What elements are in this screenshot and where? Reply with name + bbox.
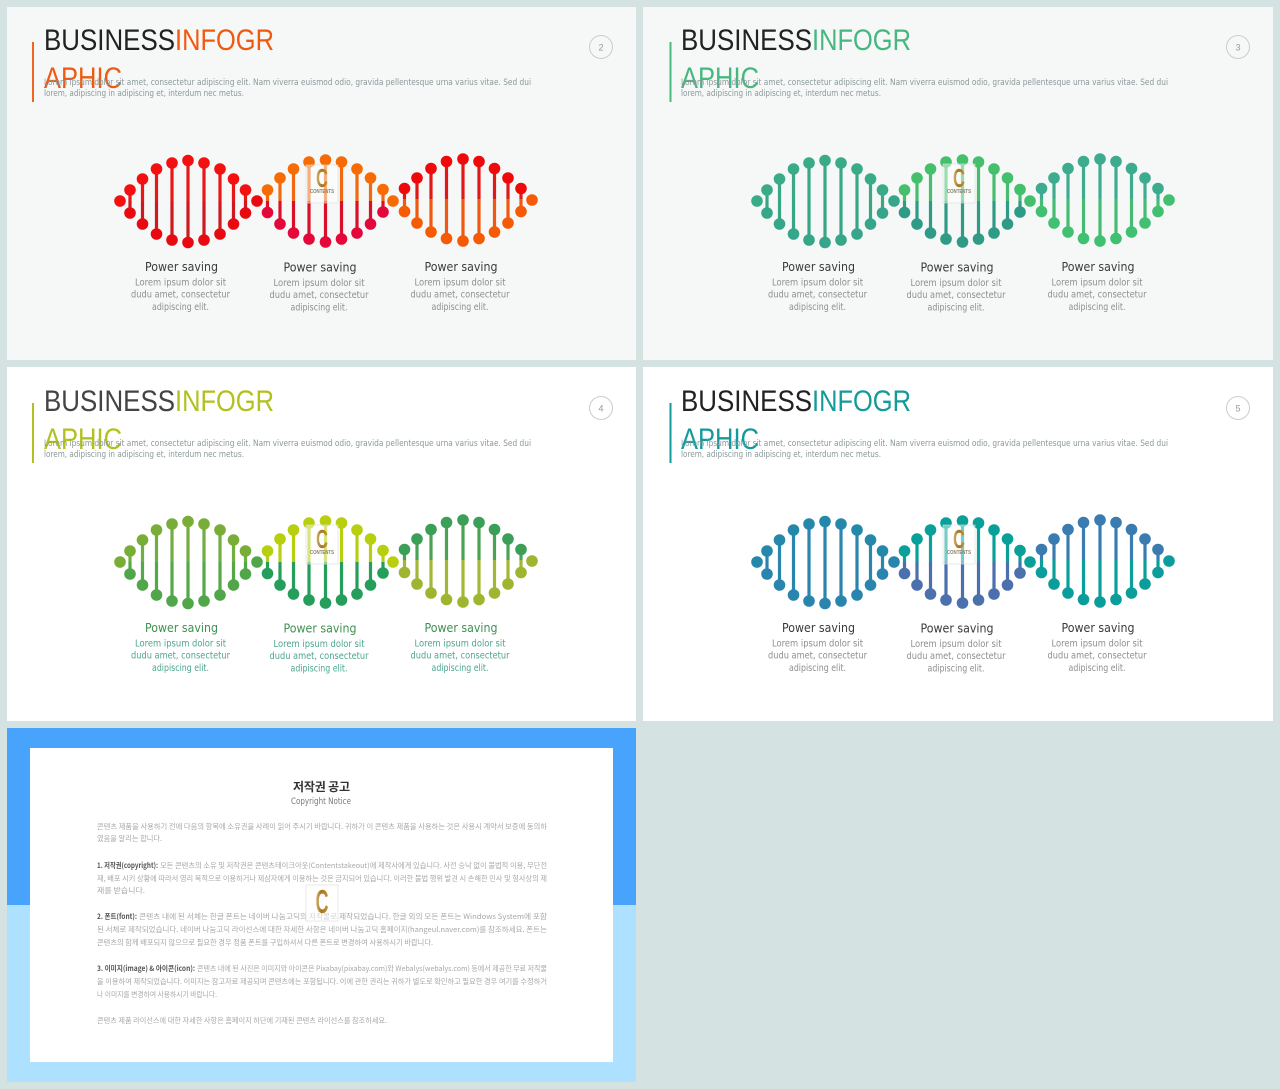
paragraph 3 images and icons: 콘텐츠 내에 된 사진은 이미지와 아이콘은 Pixabay(pixabay.com)와 Webalys(webalys.com) 등에서 제공한 무료 저작물: [197, 963, 547, 974]
label 1: dudu amet, consectetur: [131, 290, 231, 300]
paragraph 1 copyright: 재를 받습니다.: [97, 885, 145, 896]
title: [681, 24, 911, 95]
paragraph 2 font: 콘텐츠의 함께 배포되지 않으므로 필요한 경우 정품 폰트를 구입하셔서 다른 폰트로 변경하여 사용하시기 바랍니다.: [97, 937, 433, 948]
label 3: Lorem ipsum dolor sit: [414, 278, 506, 288]
label 3: Lorem ipsum dolor sit: [414, 638, 506, 650]
notice heading: 저작권 공고: [293, 778, 350, 795]
label 2: Power saving: [920, 622, 994, 636]
label 1: dudu amet, consectetur: [768, 650, 868, 662]
label 2: dudu amet, consectetur: [270, 651, 369, 662]
panel: slide 4 lime helix: [7, 367, 636, 721]
label 3: dudu amet, consectetur: [1048, 650, 1147, 662]
label 1: adipiscing elit.: [789, 302, 846, 313]
label 2: [270, 260, 369, 314]
label 2: Lorem ipsum dolor sit: [274, 639, 365, 650]
white notice card: [30, 748, 613, 1062]
watermark logo: [943, 163, 975, 203]
title: BUSINESS: [44, 385, 175, 418]
watermark logo: CONTENTS: [947, 550, 972, 556]
label 2: dudu amet, consectetur: [270, 290, 369, 301]
page number: 4: [598, 404, 604, 414]
label 3: Power saving: [1062, 260, 1134, 274]
label 1: adipiscing elit.: [152, 663, 209, 674]
strand 1: [757, 160, 894, 242]
label 1: dudu amet, consectetur: [131, 650, 231, 662]
paragraph 1 copyright: 1. 저작권(copyright):: [97, 860, 158, 871]
label 2: adipiscing elit.: [928, 664, 984, 674]
dna helix: [757, 520, 1169, 604]
watermark logo: C: [953, 524, 965, 554]
subtitle text: Lorem ipsum dolor sit amet, consectetur adipiscing elit. Nam viverra euismod odio, gravida pellentesque urna varius vitae. Sed dui: [681, 438, 1168, 448]
label 1: adipiscing elit.: [152, 302, 209, 313]
label 1: Power saving: [782, 260, 855, 274]
accent bar: [32, 403, 34, 463]
subtitle text: Lorem ipsum dolor sit amet, consectetur adipiscing elit. Nam viverra euismod odio, gravida pellentesque urna varius vitae. Sed dui: [44, 77, 531, 87]
label 1: [768, 260, 868, 313]
label 3: adipiscing elit.: [432, 302, 488, 313]
watermark logo: C: [953, 163, 965, 193]
strand 2: [904, 160, 1030, 242]
watermark logo: [943, 524, 975, 564]
page number: 2: [598, 42, 604, 52]
strand 1: [120, 160, 257, 242]
title: APHIC: [681, 423, 759, 456]
strand 2: [268, 521, 393, 603]
watermark logo: CONTENTS: [310, 189, 335, 195]
subtitle text: Lorem ipsum dolor sit amet, consectetur adipiscing elit. Nam viverra euismod odio, gravida pellentesque urna varius vitae. Sed dui: [44, 438, 531, 448]
paragraph 1 copyright: [97, 860, 547, 896]
label 2: Power saving: [284, 260, 356, 274]
panel: slide 2 red helix: [7, 7, 636, 360]
watermark logo: CONTENTS: [947, 189, 972, 195]
paragraph 2 font: 된 서체로 제작되었습니다. 네이버 나눔고딕 라이선스에 대한 자세한 사항은 네이버 나눔고딕 홈페이지(hangeul.naver.com)를 참조하세요. 폰트는: [97, 924, 547, 935]
label 2: [906, 260, 1006, 314]
page number: 5: [1235, 404, 1241, 414]
label 3: [1048, 260, 1147, 313]
title: [44, 385, 274, 456]
label 3: Power saving: [424, 621, 498, 635]
strand 3: [404, 520, 532, 602]
labels: [131, 621, 510, 674]
label 1: Lorem ipsum dolor sit: [772, 278, 863, 288]
labels: [131, 260, 510, 314]
title: BUSINESS: [681, 24, 812, 57]
closing line: 콘텐츠 제품 라이선스에 대한 자세한 사항은 홈페이지 하단에 기재된 콘텐츠 라이선스를 참조하세요.: [97, 1015, 387, 1026]
label 1: Lorem ipsum dolor sit: [135, 638, 226, 650]
panel: slide 3 green helix: [643, 7, 1273, 360]
label 3: dudu amet, consectetur: [410, 650, 510, 662]
watermark logo: [306, 524, 338, 564]
panel: slide 5 teal helix: [643, 367, 1273, 721]
label 1: Lorem ipsum dolor sit: [772, 638, 863, 650]
panel: copyright notice: [7, 728, 636, 1082]
notice heading: Copyright Notice: [291, 797, 351, 807]
label 1: [131, 260, 231, 313]
paragraph 2 font: [97, 911, 547, 948]
title: APHIC: [681, 62, 759, 95]
strand 3: [1042, 159, 1169, 241]
strand 2: [904, 521, 1030, 603]
labels: [768, 621, 1147, 674]
title: INFOGR: [175, 385, 274, 418]
title: [44, 24, 274, 95]
subtitle text: [44, 438, 531, 459]
title: INFOGR: [175, 24, 274, 57]
intro paragraph: [97, 821, 547, 844]
watermark logo: [306, 163, 338, 203]
intro paragraph: 콘텐츠 제품을 사용하기 전에 다음의 항목에 소유권을 사례이 읽어 주시기 바랍니다. 귀하가 이 콘텐츠 제품을 사용하는 것은 사용시 계약서 보증에 동의하: [97, 821, 547, 832]
notice heading: [291, 778, 351, 807]
watermark logo: CONTENTS: [310, 550, 335, 556]
label 1: adipiscing elit.: [789, 663, 846, 674]
strand 1: [757, 522, 894, 604]
label 3: dudu amet, consectetur: [410, 290, 510, 300]
label 2: [270, 622, 369, 674]
watermark logo: C: [316, 883, 328, 920]
page number: [1226, 396, 1250, 420]
label 3: [410, 260, 510, 313]
label 1: Lorem ipsum dolor sit: [135, 278, 226, 288]
watermark logo: [306, 883, 338, 921]
subtitle text: lorem, adipiscing in adipiscing et, interdum nec metus.: [44, 88, 244, 98]
label 3: [1048, 621, 1147, 674]
label 2: dudu amet, consectetur: [906, 290, 1006, 301]
paragraph 1 copyright: 재, 배포 시키 상황에 따라서 영리 목적으로 이용하거나 제삼자에게 이용하는 것은 금지되어 있습니다. 이러한 불법 행위 발견 시 손해한 민사 및 형사상의 제: [97, 873, 547, 884]
accent bar: [32, 42, 34, 102]
label 1: [131, 621, 231, 674]
subtitle text: lorem, adipiscing in adipiscing et, interdum nec metus.: [681, 88, 881, 98]
label 1: dudu amet, consectetur: [768, 290, 868, 300]
page number: [1226, 36, 1250, 58]
title: APHIC: [44, 62, 122, 95]
labels: [768, 260, 1147, 314]
subtitle text: lorem, adipiscing in adipiscing et, interdum nec metus.: [44, 449, 244, 459]
page number: [590, 396, 612, 420]
subtitle text: Lorem ipsum dolor sit amet, consectetur adipiscing elit. Nam viverra euismod odio, gravida pellentesque urna varius vitae. Sed dui: [681, 77, 1168, 87]
strand 3: [404, 159, 532, 241]
subtitle text: [681, 77, 1168, 98]
label 3: Lorem ipsum dolor sit: [1052, 278, 1143, 288]
label 2: Power saving: [920, 260, 994, 274]
dna helix: [757, 159, 1169, 242]
watermark logo: C: [316, 163, 328, 193]
title: INFOGR: [812, 24, 911, 57]
accent bar: [670, 403, 672, 463]
label 3: dudu amet, consectetur: [1048, 290, 1147, 300]
label 2: [906, 622, 1006, 674]
label 2: Lorem ipsum dolor sit: [910, 278, 1002, 289]
title: APHIC: [44, 423, 122, 456]
title: BUSINESS: [681, 385, 812, 418]
title: [681, 385, 911, 456]
dna helix: [120, 159, 532, 242]
strand 3: [1042, 520, 1169, 602]
paragraph 3 images and icons: 3. 이미지(image) & 아이콘(icon):: [97, 963, 195, 974]
label 2: Power saving: [284, 622, 356, 636]
title: INFOGR: [812, 385, 911, 418]
label 1: Power saving: [145, 260, 218, 274]
label 2: adipiscing elit.: [928, 302, 984, 314]
subtitle text: lorem, adipiscing in adipiscing et, interdum nec metus.: [681, 449, 881, 459]
paragraph 2 font: 2. 폰트(font):: [97, 911, 137, 922]
subtitle text: [681, 438, 1168, 459]
label 3: Power saving: [424, 260, 498, 274]
label 2: Lorem ipsum dolor sit: [910, 639, 1002, 650]
label 2: Lorem ipsum dolor sit: [274, 278, 365, 289]
paragraph 1 copyright: 모든 콘텐츠의 소유 및 저작권은 콘텐츠테이크아웃(Contentstakeout)에 제작사에게 있습니다. 사전 승낙 없이 불법적 이용, 무단전: [160, 860, 547, 871]
label 2: adipiscing elit.: [290, 302, 348, 314]
paragraph 2 font: 콘텐츠 내에 된 서체는 한글 폰트는 네이버 나눔고딕의 저작물로 제작되었습니다. 한글 외의 모든 폰트는 Windows System에 포함: [139, 911, 547, 922]
intro paragraph: 였음을 알리는 합니다.: [97, 833, 162, 844]
label 2: adipiscing elit.: [290, 664, 348, 674]
paragraph 3 images and icons: [97, 963, 547, 1000]
label 1: Power saving: [145, 621, 218, 635]
label 3: adipiscing elit.: [1068, 663, 1126, 674]
label 1: Power saving: [782, 621, 855, 635]
label 3: Power saving: [1062, 621, 1134, 635]
paragraph 3 images and icons: 을 이용하여 제작되었습니다. 이미지는 참고자료 제공되며 콘텐츠에는 포함됩니다. 이에 관한 권리는 귀하가 별도로 확인하고 필요한 경우 여기를 수정하거: [97, 976, 547, 987]
title: BUSINESS: [44, 24, 175, 57]
label 3: Lorem ipsum dolor sit: [1052, 638, 1143, 650]
dna helix: [120, 520, 532, 604]
watermark logo: C: [316, 524, 328, 554]
accent bar: [670, 42, 672, 102]
label 3: [410, 621, 510, 674]
page number: 3: [1235, 42, 1241, 52]
label 3: adipiscing elit.: [1068, 302, 1126, 313]
label 1: [768, 621, 868, 674]
paragraph 3 images and icons: 나 이미지를 변경하여 사용하시기 바랍니다.: [97, 989, 217, 1000]
label 3: adipiscing elit.: [432, 663, 488, 674]
strand 2: [268, 160, 393, 242]
label 2: dudu amet, consectetur: [906, 651, 1006, 662]
strand 1: [120, 522, 257, 604]
subtitle text: [44, 77, 531, 98]
page number: [590, 36, 612, 58]
